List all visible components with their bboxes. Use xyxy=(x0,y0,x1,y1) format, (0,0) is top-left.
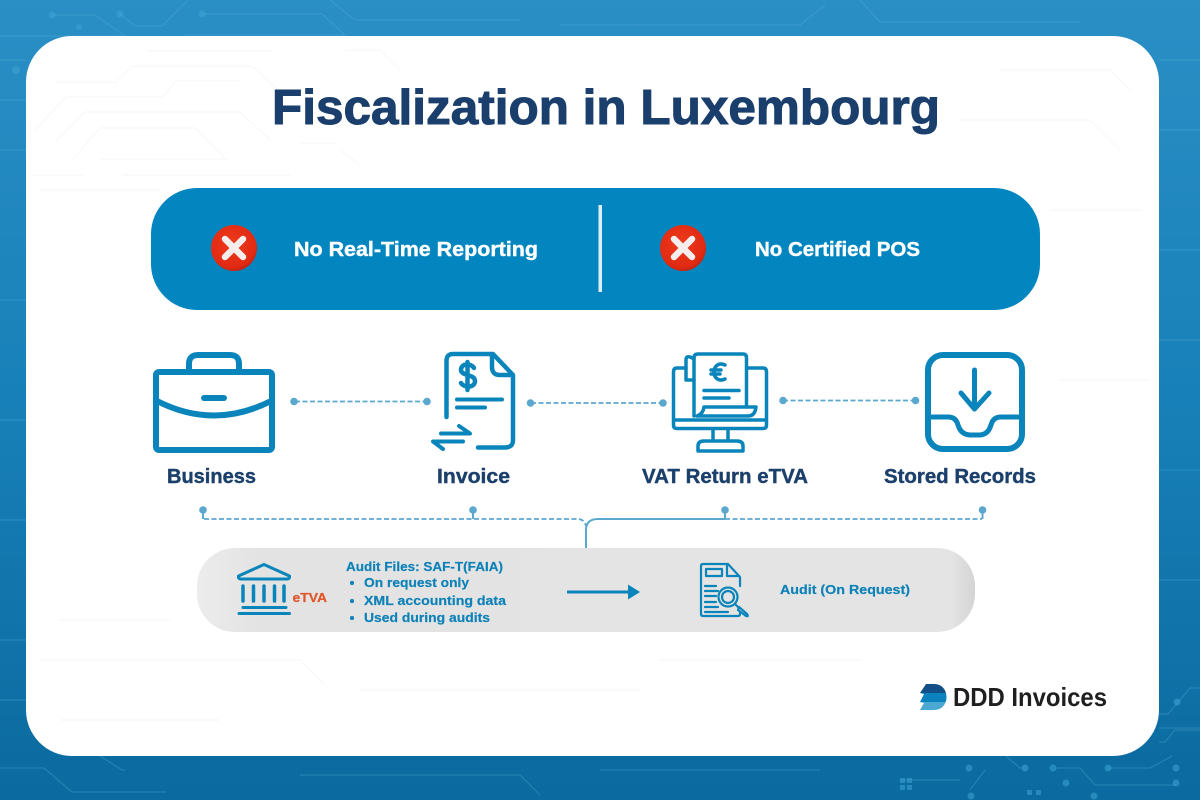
label: business: Business xyxy=(167,466,256,488)
text: audit on request: Audit (On Request) xyxy=(780,582,910,597)
icon: audit document with magnifier xyxy=(701,564,748,616)
icon: invoice document xyxy=(433,354,513,449)
title: Fiscalization in Luxembourg xyxy=(272,81,940,135)
text: logo wordmark: DDD Invoices xyxy=(953,682,1107,712)
text block: audit files list: On request only xyxy=(364,575,470,590)
icon: red cross right xyxy=(660,225,706,271)
arrow: business to invoice connector xyxy=(290,398,431,405)
text: no certified POS: No Certified POS xyxy=(755,239,920,261)
connector: four stages joining into audit panel xyxy=(199,506,986,548)
icon: briefcase xyxy=(156,355,272,450)
icon: stored records inbox tray xyxy=(928,355,1022,449)
arrow: VAT return to stored records connector xyxy=(779,397,919,404)
text block: audit files list: XML accounting data xyxy=(364,593,507,608)
icon: logo mark xyxy=(920,684,946,710)
text block: audit files list xyxy=(346,559,507,625)
text block: audit files list: Audit Files: SAF-T(FAIA) xyxy=(346,559,503,574)
label: invoice: Invoice xyxy=(437,466,510,488)
logo: DDD Invoices xyxy=(920,684,1106,710)
label: VAT return eTVA: VAT Return eTVA xyxy=(642,466,808,488)
panel: no real-time reporting and no certified POS banner xyxy=(151,188,1040,310)
text block: audit files list: Used during audits xyxy=(364,610,490,625)
label: eTVA: eTVA xyxy=(292,591,327,605)
icon: tax authority bank building xyxy=(238,564,290,614)
icon: monitor with euro document xyxy=(674,354,766,451)
arrow: audit files to audit xyxy=(567,584,640,600)
label: stored records: Stored Records xyxy=(884,466,1036,488)
icon: red cross left xyxy=(211,225,257,271)
arrow: invoice to VAT return connector xyxy=(527,399,667,407)
panel: audit files xyxy=(197,548,975,632)
text: no real-time reporting: No Real-Time Reporting xyxy=(294,239,538,261)
